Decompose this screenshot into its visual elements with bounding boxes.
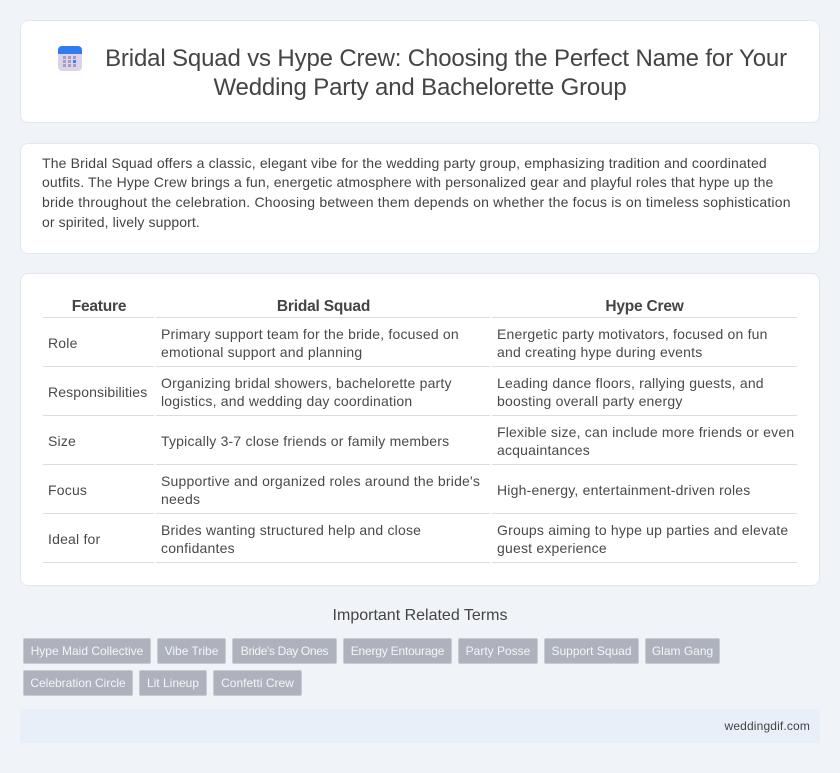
related term tags: Lit Lineup [147,676,199,690]
comparison table: Hype Crew [605,298,684,315]
comparison table: Ideal for [48,531,100,547]
title [105,45,787,101]
comparison table: Brides wanting structured help and close [161,522,421,538]
comparison table: needs [161,491,200,507]
heading: important related terms: Important Related Terms [333,607,507,624]
header panel [20,20,820,123]
related term tags: Hype Maid Collective [31,644,143,658]
comparison table: Groups aiming to hype up parties and elevate [497,522,788,538]
intro text: bride throughout the celebration. Choosing between them depends on whether the focus is on timeless sophistication [42,194,791,210]
related term tags [23,638,720,696]
comparison table: Feature [72,298,126,315]
related term tags: Glam Gang [652,644,713,658]
comparison table: Flexible size, can include more friends or even [497,424,794,440]
comparison table: Role [48,335,78,351]
intro text [42,155,791,230]
intro text: outfits. The Hype Crew brings a fun, energetic atmosphere with personalized gear and playful roles that hype up the [42,174,773,190]
related term tags: Vibe Tribe [165,644,218,658]
intro text: The Bridal Squad offers a classic, elegant vibe for the wedding party group, emphasizing tradition and coordinated [42,155,767,171]
comparison table: logistics, and wedding day coordination [161,393,412,409]
comparison table: acquaintances [497,442,590,458]
related term tags: Support Squad [551,644,632,658]
comparison table: emotional support and planning [161,344,362,360]
comparison table: Bridal Squad [277,298,370,315]
intro panel [20,143,820,254]
comparison table: boosting overall party energy [497,393,683,409]
comparison table: High-energy, entertainment-driven roles [497,482,750,498]
intro text: or spirited, lively support. [42,214,200,230]
comparison table: confidantes [161,540,235,556]
comparison table: Responsibilities [48,384,147,400]
panel: comparison table [20,273,820,586]
footer bar [20,709,820,743]
comparison table: and creating hype during events [497,344,702,360]
related term tags: Party Posse [466,644,530,658]
comparison table: Supportive and organized roles around the bride's [161,473,480,489]
footer credit: weddingdif.com [725,719,810,733]
comparison table: Size [48,433,76,449]
comparison table: Focus [48,482,87,498]
related term tags: Confetti Crew [221,676,294,690]
comparison table: guest experience [497,540,607,556]
icon: calendar [58,46,82,71]
related term tags: Bride's Day Ones [241,644,328,658]
comparison table: Typically 3-7 close friends or family members [161,433,449,449]
related term tags: Energy Entourage [351,644,444,658]
related term tags: Celebration Circle [30,676,126,690]
comparison table: Primary support team for the bride, focused on [161,326,459,342]
comparison table: Energetic party motivators, focused on fun [497,326,768,342]
comparison table: Leading dance floors, rallying guests, and [497,375,764,391]
title: Wedding Party and Bachelorette Group [213,74,627,101]
comparison table [43,298,797,563]
title: ​Bridal Squad vs Hype Crew: Choosing the Perfect Name for Your [105,45,787,72]
comparison table: Organizing bridal showers, bachelorette party [161,375,452,391]
